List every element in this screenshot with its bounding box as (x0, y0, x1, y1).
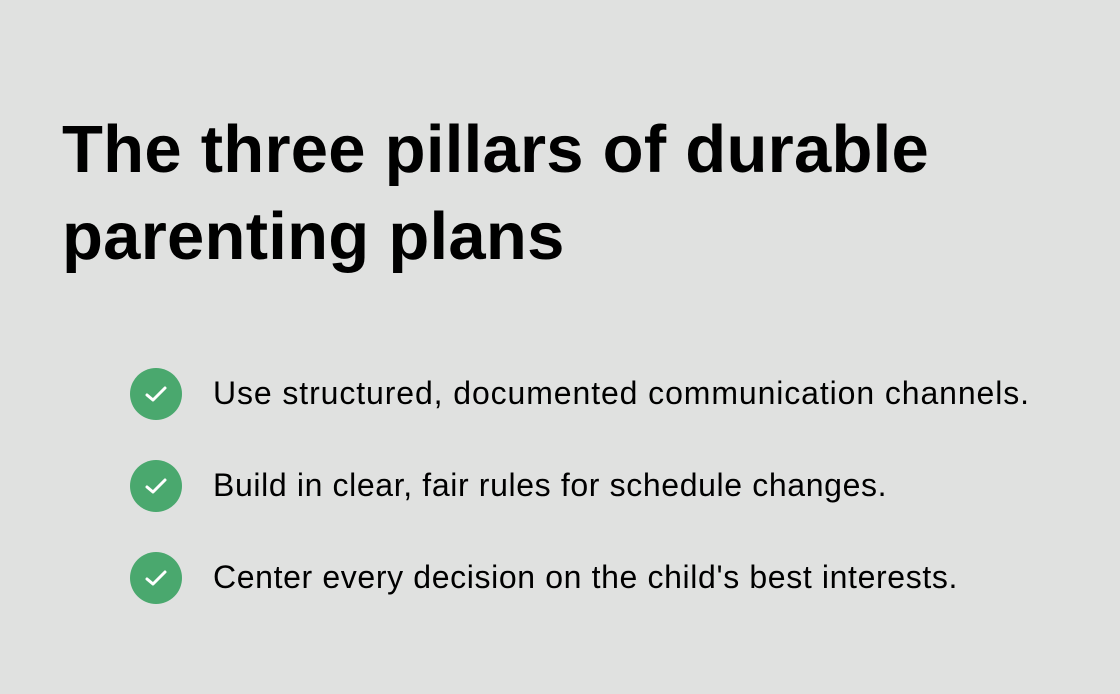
icon: check (130, 552, 182, 604)
text: item 2: Build in clear, fair rules for schedule changes. (213, 467, 887, 503)
text: item 3: Center every decision on the child's best interests. (213, 559, 958, 595)
title: The three pillars of durable (62, 112, 929, 187)
icon: check (130, 460, 182, 512)
icon: check (130, 368, 182, 420)
item 3 (130, 552, 958, 604)
item 2 (130, 460, 887, 512)
item 1 (130, 368, 1030, 420)
title (62, 112, 929, 274)
text: item 1: Use structured, documented communication channels. (213, 375, 1030, 411)
title: parenting plans (62, 199, 565, 274)
